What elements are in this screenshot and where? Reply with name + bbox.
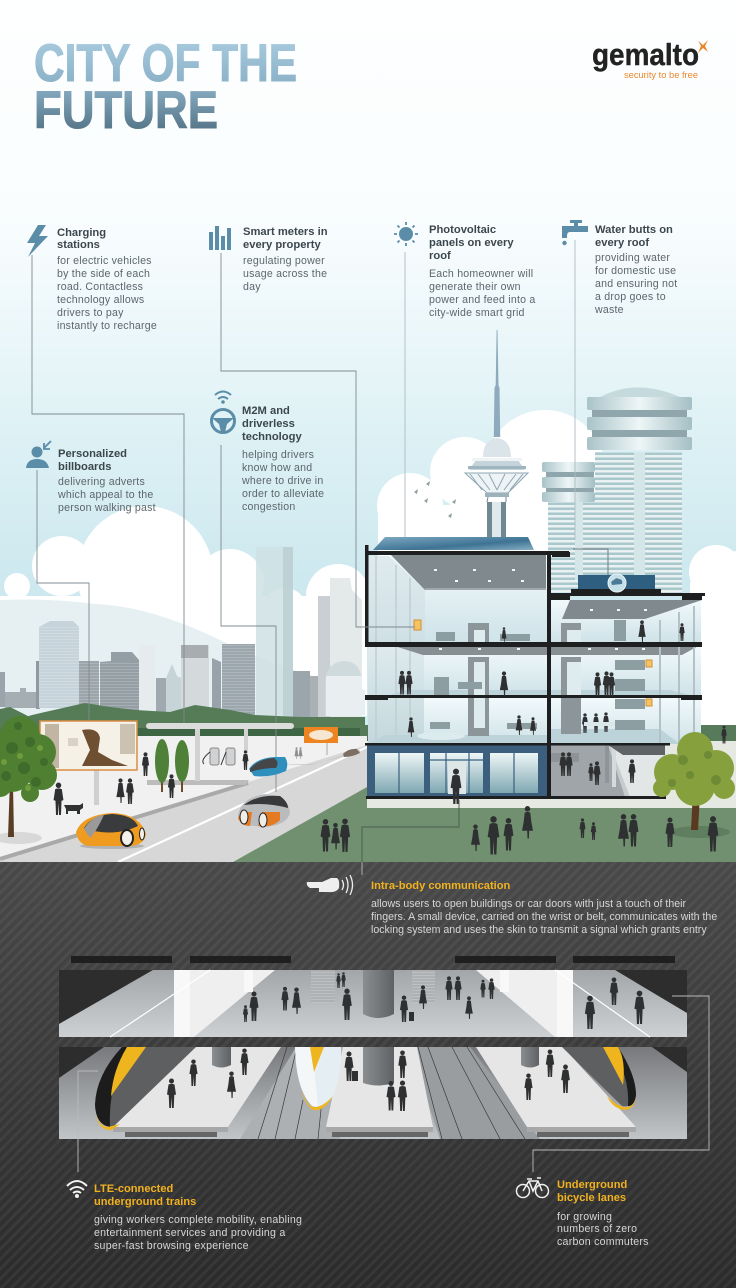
text: bicycle lanes: bicycle lanes [557, 1192, 626, 1204]
text: personalized billboards: Personalized [58, 448, 127, 460]
text: personalized billboards [57, 448, 156, 514]
title: FUTURE [34, 81, 218, 140]
billboard [40, 721, 137, 805]
text: M2M: driverless [242, 418, 295, 430]
icon: wifi [67, 1181, 87, 1198]
title [34, 34, 297, 140]
text: LTE trains: LTE-connected [94, 1183, 174, 1195]
icon: sun [394, 222, 418, 246]
furniture [430, 620, 645, 730]
glass wall left [368, 556, 425, 744]
text: photovoltaic panels: city-wide smart grid [429, 307, 525, 319]
text: personalized billboards: billboards [58, 461, 111, 473]
text: charging stations: stations [57, 239, 100, 251]
text: photovoltaic panels: Each homeowner will [429, 268, 533, 280]
text: charging stations: road. Contactless [57, 281, 143, 293]
text: water butts: providing water [595, 252, 670, 264]
far car [343, 749, 360, 757]
text: LTE trains: entertainment services and providing a [94, 1227, 285, 1239]
text: water butts: for domestic use [595, 265, 676, 277]
text: intra-body communication: fingers. A small device, carried on the wrist or belt, communicates with the [371, 911, 717, 923]
text: intra-body communication: locking system and uses the skin to transmit a signal which grants entry [371, 924, 707, 936]
icon: water tap [562, 220, 588, 245]
text: photovoltaic panels: Photovoltaic [429, 224, 496, 236]
text: smart meters [243, 226, 328, 293]
ceiling vents [71, 956, 675, 963]
text: M2M: congestion [242, 501, 295, 513]
text: M2M: technology [242, 431, 302, 443]
text: water butts: every roof [595, 237, 649, 249]
small screens [414, 620, 652, 706]
text: charging stations: Charging [57, 227, 106, 239]
text: charging stations: drivers to pay [57, 307, 124, 319]
text: charging stations: instantly to recharge [57, 320, 157, 332]
silver car [238, 794, 290, 827]
sky background [0, 0, 736, 730]
underground background [0, 862, 736, 1288]
text: LTE trains: super-fast browsing experience [94, 1240, 249, 1252]
text: water butts [594, 224, 677, 316]
TV tower [465, 330, 528, 538]
right ground strip [360, 725, 736, 808]
icon: wifi and steering wheel [212, 392, 234, 432]
text: water butts: a drop goes to [595, 291, 666, 303]
building cross-section [365, 537, 705, 804]
right ground interior [551, 745, 665, 797]
text: photovoltaic panels: generate their own [429, 281, 521, 293]
text: photovoltaic panels: power and feed into a [429, 294, 536, 306]
leader: bicycle lanes [533, 996, 709, 1172]
left train [95, 1047, 196, 1127]
text: water butts: Water butts on [595, 224, 673, 236]
text: personalized billboards: delivering adverts [58, 476, 145, 488]
text: intra-body communication: allows users to open buildings or car doors with just a touch of their [371, 898, 687, 910]
pavement [0, 736, 367, 860]
title: CITY OF THE [34, 34, 297, 93]
icon: charging bolt [27, 225, 48, 257]
text: water butts: waste [594, 304, 624, 316]
icon: pointing hand with signal [307, 875, 352, 895]
skyline [0, 547, 362, 718]
hills [0, 703, 365, 740]
text: photovoltaic panels: panels on every [429, 237, 514, 249]
room interiors [368, 556, 548, 642]
floor surfaces [368, 735, 548, 744]
roof solar panels [373, 537, 534, 550]
text: M2M: know how and [242, 462, 312, 474]
text: intra-body communication [371, 880, 717, 936]
text: photovoltaic panels: roof [429, 250, 451, 262]
upper level: concourse and bicycle lanes [59, 970, 687, 1037]
blue car [249, 757, 287, 776]
text: personalized billboards: which appeal to the [57, 489, 153, 501]
leader: LTE [78, 1071, 98, 1172]
cypress trees [155, 739, 189, 792]
lobby blue front [367, 745, 548, 796]
birds [414, 481, 456, 518]
text: personalized billboards: person walking past [58, 502, 156, 514]
text: charging stations: by the side of each [57, 268, 150, 280]
orange sign [304, 727, 338, 755]
columns right [660, 606, 694, 744]
text: M2M: helping drivers [242, 449, 314, 461]
lower level: train platforms [59, 1047, 687, 1139]
text: charging stations [57, 227, 157, 332]
core shafts [468, 623, 581, 736]
charging canopy [146, 723, 294, 781]
leader: intra-body on dark band [361, 862, 363, 875]
text: M2M: order to alleviate [242, 488, 324, 500]
text: LTE trains: underground trains [94, 1196, 196, 1208]
text: smart meters: usage across the [243, 268, 327, 280]
cars [76, 749, 360, 849]
text: bicycle lanes: Underground [557, 1179, 627, 1191]
hazy hill [0, 600, 365, 715]
icon: bicycle [516, 1178, 548, 1198]
pillars [212, 1047, 231, 1068]
street people [54, 747, 302, 815]
road [0, 745, 367, 862]
platform people [167, 1078, 176, 1108]
black frame [365, 545, 705, 799]
text: smart meters: every property [243, 239, 322, 251]
ceiling lights [434, 569, 647, 650]
right train [562, 1047, 636, 1106]
clouds [0, 410, 736, 732]
text: intra-body communication: Intra-body communication [371, 880, 511, 892]
text: bicycle lanes: for growing [557, 1211, 612, 1223]
text: LTE trains [94, 1183, 302, 1252]
text: smart meters: Smart meters in [243, 226, 328, 238]
logo: gemalto: security to be free [624, 70, 698, 81]
text: photovoltaic panels [429, 224, 536, 319]
icon: smart meter bars [209, 226, 231, 250]
text: M2M [241, 405, 324, 513]
center train [295, 1047, 341, 1107]
platforms [113, 1047, 281, 1127]
text: charging stations: for electric vehicles [57, 255, 152, 267]
text: smart meters: regulating power [243, 255, 325, 267]
left tree [0, 716, 57, 844]
text: M2M: where to drive in [241, 475, 323, 487]
orange car [76, 813, 146, 849]
icon: person with arrow [26, 441, 51, 468]
text: bicycle lanes [557, 1179, 649, 1248]
text: smart meters: day [243, 281, 261, 293]
text: bicycle lanes: numbers of zero [557, 1223, 637, 1235]
text: water butts: and ensuring not [595, 278, 677, 290]
lawn people [321, 726, 727, 854]
far buildings behind house [542, 388, 692, 594]
text: M2M: M2M and [242, 405, 290, 417]
leader lines [32, 240, 575, 862]
roof tank [578, 575, 655, 589]
text: bicycle lanes: carbon commuters [557, 1236, 649, 1248]
right tree [653, 732, 735, 838]
ceilings [389, 553, 546, 590]
road markings [0, 747, 367, 862]
logo: gemalto: gemalto [592, 37, 699, 72]
lawn [233, 787, 736, 862]
people in building [398, 671, 406, 694]
text: LTE trains: giving workers complete mobility, enabling [94, 1214, 302, 1226]
text: charging stations: technology allows [57, 294, 144, 306]
